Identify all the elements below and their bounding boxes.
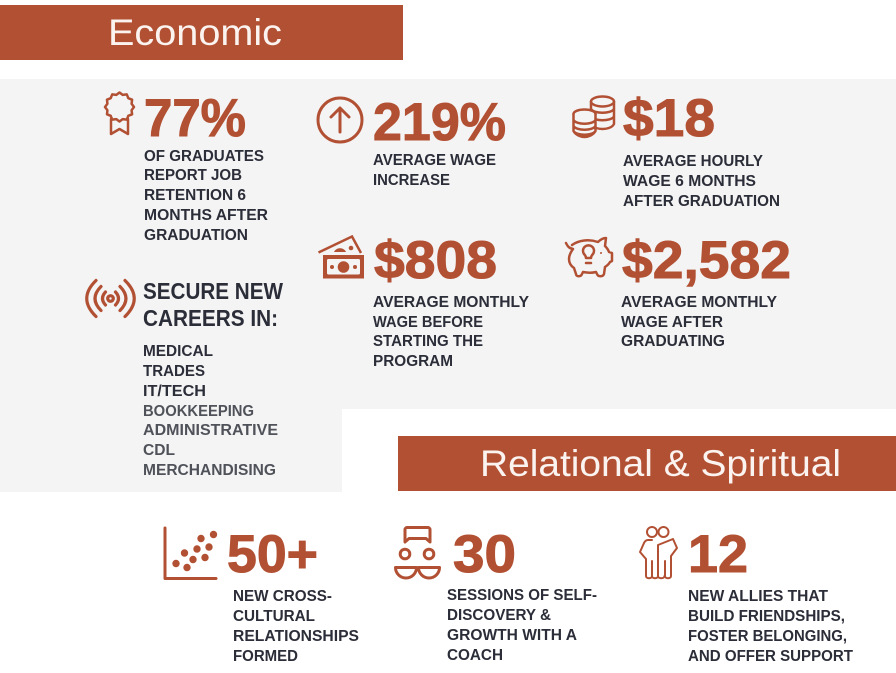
stat: 77%: MONTHS AFTER	[144, 207, 268, 224]
stat: 30: SESSIONS OF SELF-	[447, 587, 597, 604]
stat: 50+: CULTURAL	[233, 608, 315, 625]
stat: 50+: 50+	[227, 525, 318, 584]
text: secure new careers list: MEDICAL	[143, 343, 213, 360]
stat: 12: AND OFFER SUPPORT	[688, 648, 853, 665]
text: secure new careers list: CAREERS IN:	[143, 305, 278, 331]
icon: banknotes	[318, 236, 364, 278]
heading: Relational & Spiritual: Relational & Spiritual	[480, 443, 841, 484]
text: secure new careers list: BOOKKEEPING	[143, 403, 254, 420]
stat: 30: COACH	[447, 647, 503, 664]
icon: coin stacks	[574, 96, 614, 137]
stat: 77%	[144, 89, 268, 244]
icon: two allies	[640, 527, 677, 578]
stat: $808: AVERAGE MONTHLY	[373, 294, 529, 311]
stat: 30	[447, 525, 597, 664]
stat: $18: $18	[623, 89, 715, 148]
stat: $2,582: WAGE AFTER	[621, 314, 723, 331]
stat: 12: FOSTER BELONGING,	[688, 628, 847, 645]
text: secure new careers list: TRADES	[143, 363, 205, 380]
stat: $18: WAGE 6 MONTHS	[623, 173, 756, 190]
text: secure new careers list: MERCHANDISING	[143, 462, 276, 479]
heading: Economic: Economic	[108, 12, 282, 53]
stat: $18: AVERAGE HOURLY	[623, 153, 763, 170]
stat: 219%: INCREASE	[373, 172, 450, 189]
stat: 50+: NEW CROSS-	[233, 588, 332, 605]
stat: 219%: 219%	[373, 93, 506, 152]
stat: $808: STARTING THE	[373, 333, 483, 350]
stat: 77%: 77%	[144, 89, 246, 148]
stat: 50+: RELATIONSHIPS	[233, 628, 359, 645]
stat: 12: BUILD FRIENDSHIPS,	[688, 608, 845, 625]
stat: $808	[373, 231, 529, 370]
text: secure new careers list: IT/TECH	[143, 383, 206, 400]
text: secure new careers list: CDL	[143, 442, 175, 459]
icon: award ribbon	[105, 92, 134, 134]
heading: Relational & Spiritual	[398, 436, 896, 491]
stat: 50+: FORMED	[233, 648, 298, 665]
stat: 77%: RETENTION 6	[144, 187, 246, 204]
stat: $18	[623, 89, 780, 210]
stat: 30: 30	[453, 525, 516, 584]
panel: economic background	[0, 79, 896, 492]
stat: 219%: AVERAGE WAGE	[373, 152, 496, 169]
stat: $18: AFTER GRADUATION	[623, 193, 780, 210]
heading: Economic	[0, 5, 403, 60]
stat: $2,582	[621, 231, 791, 350]
text: secure new careers list	[143, 278, 283, 479]
stat: 12: NEW ALLIES THAT	[688, 588, 828, 605]
stat: 30: DISCOVERY &	[447, 607, 551, 624]
stat: 77%: OF GRADUATES	[144, 148, 264, 165]
stat: 219%	[373, 93, 506, 189]
stat: $2,582: GRADUATING	[621, 333, 725, 350]
stat: $2,582: AVERAGE MONTHLY	[621, 294, 777, 311]
icon: scatter chart	[165, 528, 217, 578]
stat: 30: GROWTH WITH A	[447, 627, 577, 644]
icon: up arrow in circle	[318, 98, 362, 142]
icon: broadcast signal	[87, 280, 134, 316]
stat: $808: $808	[374, 231, 497, 290]
stat: $808: WAGE BEFORE	[373, 314, 483, 331]
text: secure new careers list: ADMINISTRATIVE	[143, 422, 278, 439]
icon: coaching session	[396, 528, 440, 578]
icon: piggy bank with lightbulb	[566, 238, 612, 276]
stat: 77%: REPORT JOB	[144, 167, 242, 184]
stat: 12: 12	[688, 525, 748, 584]
stat: 12	[688, 525, 853, 665]
stat: 50+	[227, 525, 359, 665]
stat: $2,582: $2,582	[622, 231, 791, 290]
stat: $808: PROGRAM	[373, 353, 453, 370]
text: secure new careers list: SECURE NEW	[143, 278, 283, 304]
stat: 77%: GRADUATION	[144, 227, 248, 244]
